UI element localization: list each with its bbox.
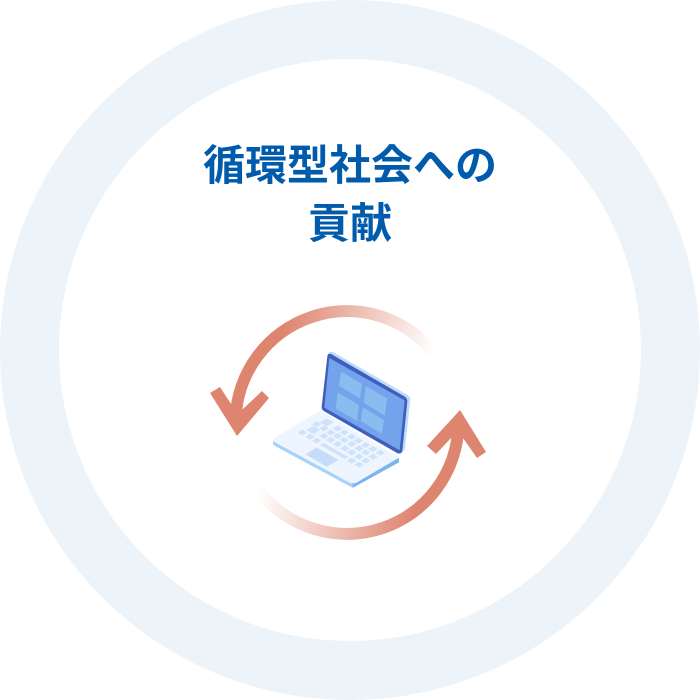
- icon: laptop: [273, 352, 410, 488]
- screen windows: [336, 372, 387, 434]
- touchpad: [306, 447, 338, 467]
- title: [203, 142, 497, 246]
- arrow: upper counter-clockwise: [210, 311, 434, 436]
- title: 貢献: [308, 200, 392, 246]
- laptop screen: [322, 352, 410, 454]
- cycle arrows and laptop illustration: [210, 311, 486, 534]
- arrow: lower counter-clockwise: [260, 410, 486, 534]
- keyboard: [298, 418, 385, 468]
- laptop base: [273, 411, 399, 488]
- title: 循環型社会への: [203, 142, 497, 189]
